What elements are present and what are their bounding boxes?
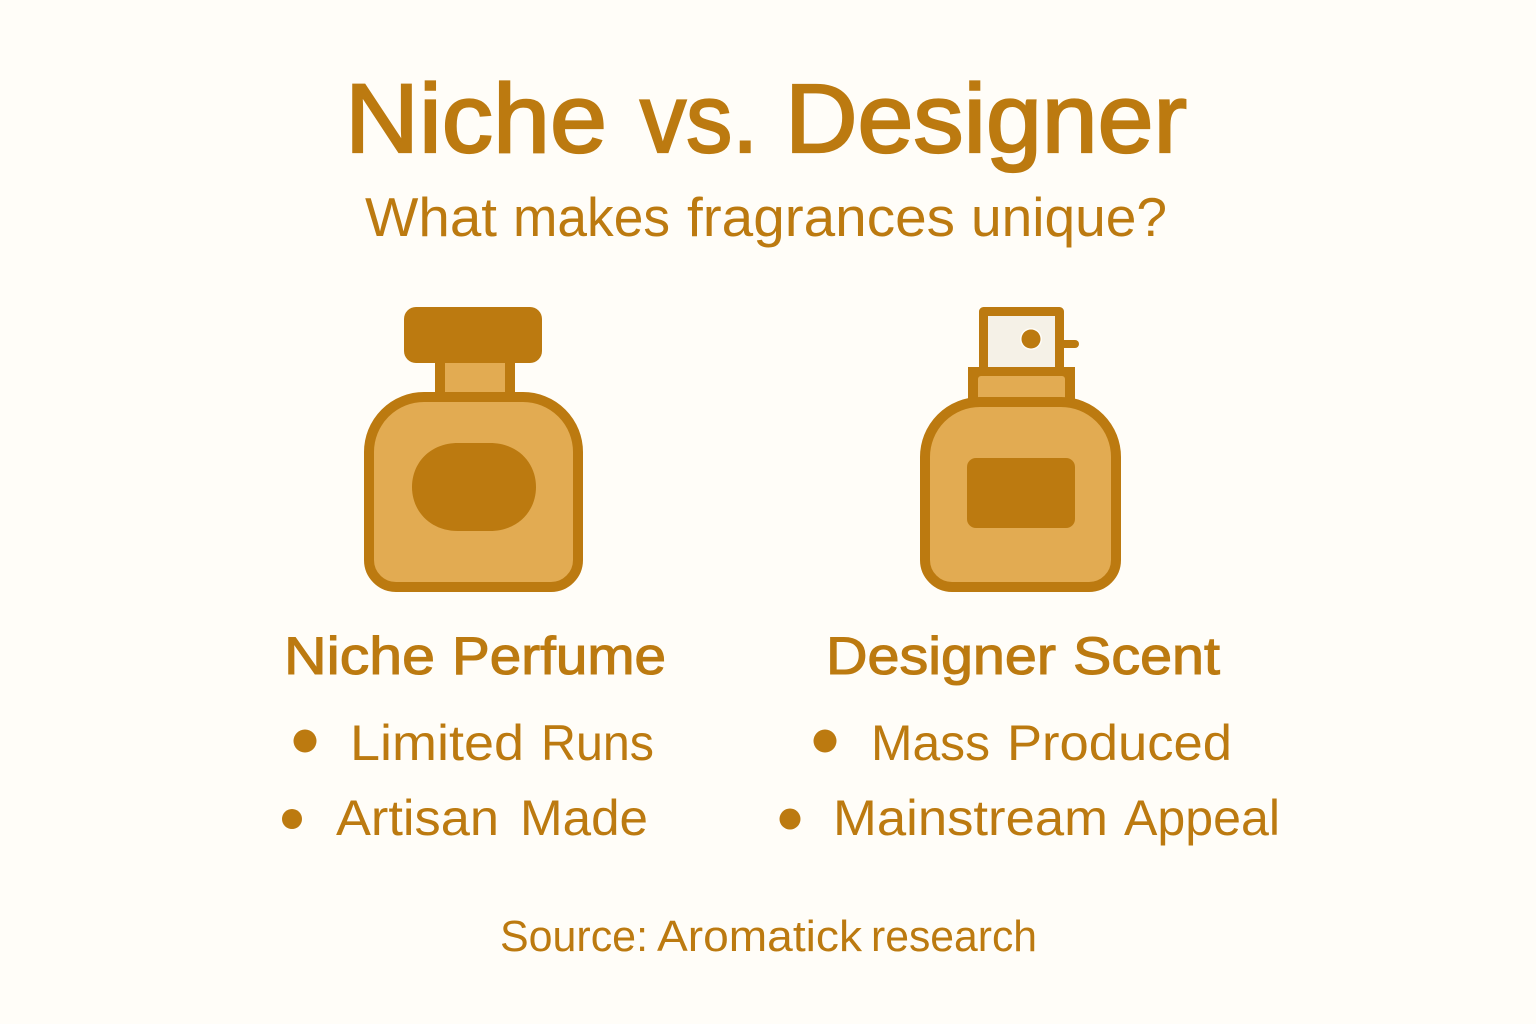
title: Designer [785, 64, 1187, 173]
bullet: artisan made: Made [520, 790, 648, 846]
subtitle: unique? [971, 186, 1167, 248]
source note: research [871, 912, 1037, 961]
title: Niche [345, 64, 607, 173]
subtitle: makes [513, 186, 670, 248]
heading: niche perfume: Niche [284, 627, 435, 686]
subtitle: fragrances [687, 186, 955, 248]
heading: niche perfume: Perfume [452, 627, 666, 686]
bullet: mass produced: Mass [871, 715, 990, 771]
bullet: mainstream appeal: Appeal [1124, 790, 1280, 846]
bullet: limited runs: Runs [541, 715, 654, 771]
subtitle: What [365, 186, 497, 248]
subtitle [365, 186, 1167, 248]
bullet: limited runs: Limited [350, 715, 524, 771]
heading: designer scent [826, 627, 1220, 686]
source note [500, 912, 1037, 961]
bullet: mainstream appeal: Mainstream [833, 790, 1108, 846]
title: vs. [640, 64, 758, 173]
heading: designer scent: Scent [1073, 627, 1220, 686]
icon: designer spray bottle [925, 312, 1116, 587]
source note: Aromatick [657, 912, 863, 961]
source note: Source: [500, 912, 648, 961]
bullet: mass produced [814, 715, 1232, 771]
bullet: mass produced: Produced [1007, 715, 1232, 771]
heading: niche perfume [284, 627, 666, 686]
title [345, 64, 1187, 173]
bullet: limited runs [294, 715, 654, 771]
panel: designer scent [780, 312, 1280, 846]
bullet: artisan made [282, 790, 648, 846]
icon: niche perfume bottle [369, 307, 578, 587]
heading: designer scent: Designer [826, 627, 1056, 686]
bullet: mainstream appeal [780, 790, 1280, 846]
bullet: artisan made: Artisan [336, 790, 499, 846]
panel: niche perfume [282, 307, 666, 846]
